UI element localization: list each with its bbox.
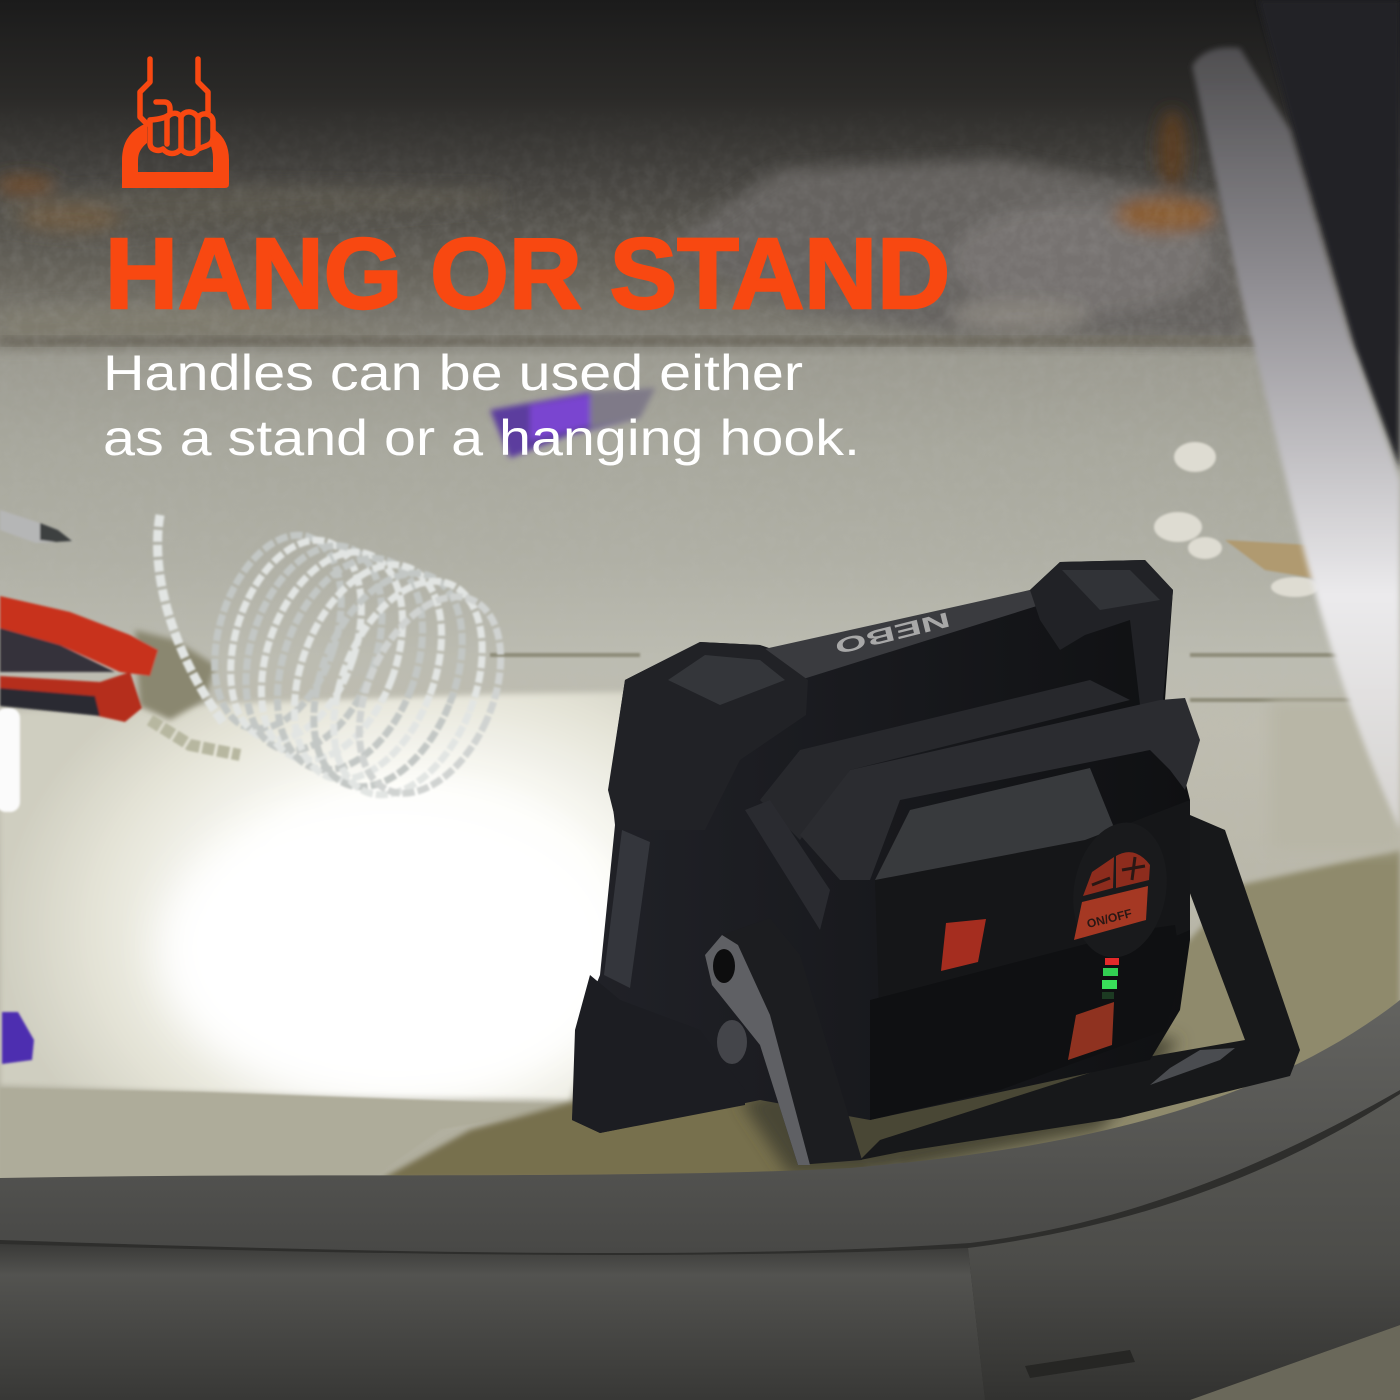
arm highlight strip bbox=[705, 935, 810, 1165]
hose seam slot bbox=[1025, 1350, 1135, 1378]
olive ground in lamp shadow bbox=[380, 1090, 880, 1180]
description line 1: Handles can be used either bbox=[103, 345, 803, 401]
carrying handle bbox=[800, 698, 1200, 880]
wall ledge shadow bbox=[0, 336, 1270, 346]
knob bbox=[717, 1020, 747, 1064]
lower concrete strip bbox=[0, 1088, 575, 1180]
minus button bbox=[1083, 857, 1114, 896]
icon: hand gripping handle bbox=[122, 59, 229, 188]
purple object left edge bbox=[2, 1012, 34, 1064]
control block bbox=[875, 800, 1190, 1040]
icon right strap bbox=[198, 59, 208, 112]
lower left foot bbox=[572, 975, 745, 1133]
debris band along wall bbox=[0, 110, 1250, 345]
button symbols bbox=[1092, 857, 1145, 885]
red square button bbox=[941, 919, 986, 971]
inner handle panel bbox=[875, 768, 1115, 920]
wall flakes bbox=[1154, 442, 1319, 597]
rear recessed panel bbox=[760, 680, 1130, 840]
pliers bbox=[0, 596, 215, 722]
NEBO logo: NEBO bbox=[832, 607, 952, 658]
title: HANG OR STAND bbox=[105, 218, 950, 330]
white bounce glow bbox=[160, 800, 620, 1100]
corner cap facet bbox=[668, 655, 785, 705]
top right corner cap bbox=[1030, 560, 1173, 705]
battery indicator LEDs bbox=[1102, 958, 1119, 999]
rear hose bbox=[0, 1000, 1400, 1253]
stand foot highlight bbox=[1150, 1048, 1235, 1085]
insulated hoses foreground bbox=[0, 1000, 1400, 1400]
battery release button bbox=[1068, 1002, 1114, 1060]
pivot hole bbox=[713, 949, 735, 983]
on off label: ON/OFF bbox=[1085, 906, 1133, 931]
icon thumb bbox=[150, 102, 170, 120]
control dial bbox=[1063, 815, 1177, 965]
left front bezel bbox=[604, 830, 650, 988]
front hose left section bbox=[0, 1244, 985, 1400]
white object left edge bbox=[0, 708, 20, 812]
hose backing shadow bbox=[0, 1040, 1400, 1400]
icon fist bbox=[150, 112, 213, 154]
ledge highlight lines bbox=[490, 655, 1360, 700]
diagonal body band bbox=[745, 800, 830, 930]
grey pipe on right bbox=[1192, 47, 1400, 830]
dark upholstery top right bbox=[1258, 0, 1400, 470]
right cap facet bbox=[1062, 570, 1160, 610]
cardboard scrap bbox=[1225, 540, 1325, 580]
right stand arm bbox=[860, 815, 1300, 1160]
purple marker on ledge bbox=[490, 388, 655, 458]
on off button bbox=[1074, 886, 1148, 940]
lamp rear body bbox=[572, 560, 1190, 1133]
ground corner bbox=[1190, 1325, 1400, 1400]
floor shadow under lamp bbox=[740, 1020, 1180, 1175]
icon left strap bbox=[140, 59, 150, 124]
top left corner cap bbox=[608, 642, 808, 830]
description line 2: as a stand or a hanging hook. bbox=[103, 410, 860, 466]
wire chain coil bbox=[150, 515, 529, 817]
work light bbox=[572, 560, 1300, 1165]
plus button bbox=[1116, 852, 1150, 888]
description text bbox=[103, 345, 860, 466]
front hose right section bbox=[968, 1094, 1400, 1400]
icon base bbox=[122, 123, 229, 188]
left stand arm bbox=[705, 918, 862, 1165]
screwdriver bit bbox=[0, 510, 72, 543]
top edge strip bbox=[760, 590, 1040, 680]
concrete grain texture bbox=[2, 168, 1234, 346]
lit floor patch bbox=[0, 692, 640, 1100]
right wall patch bbox=[1270, 700, 1400, 850]
battery pack bbox=[870, 925, 1182, 1120]
